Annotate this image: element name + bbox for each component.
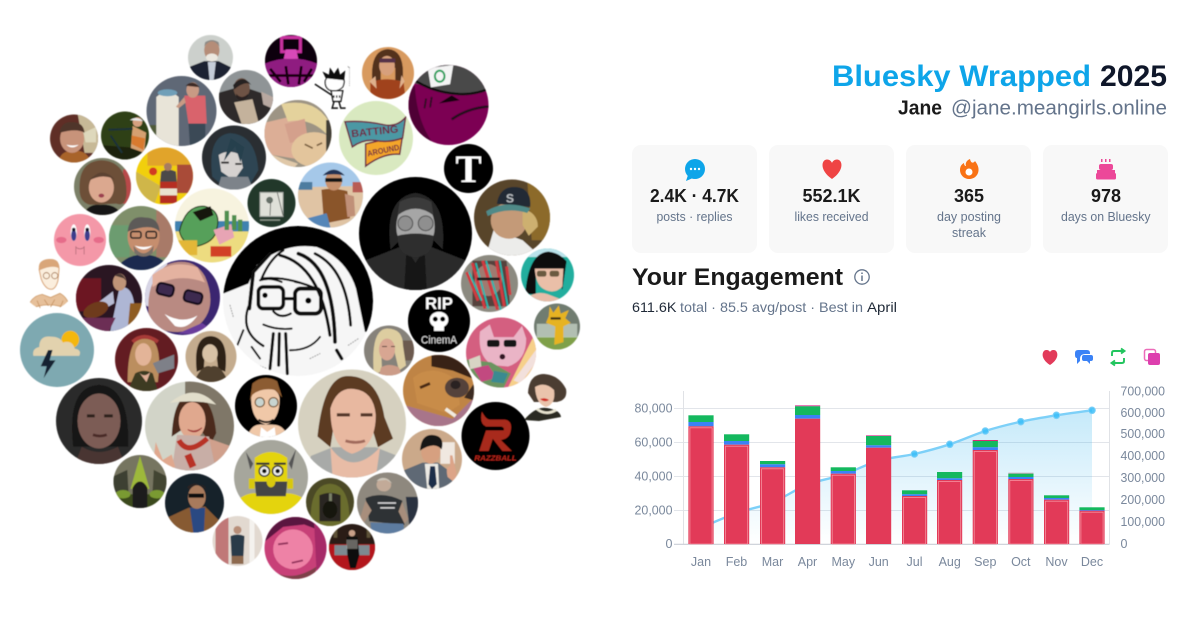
- avatar: yellow star mascot at field: [534, 304, 580, 350]
- bar: Feb: [724, 434, 749, 544]
- avatar cluster: [20, 35, 580, 579]
- icon: likes: [1043, 350, 1057, 365]
- avatar: sepia portrait woman: [186, 331, 236, 382]
- avatar: older man in suit: [188, 35, 233, 80]
- avatar: red-cyan glitch portrait: [461, 255, 518, 312]
- heading: your engagement: Your Engagement: [632, 264, 843, 291]
- panel: posts and replies: 2.4K · 4.7K: [650, 186, 739, 206]
- bar: Aug: [937, 472, 962, 544]
- month labels: May: [831, 555, 856, 569]
- avatar: line-art bust with glasses: [28, 259, 70, 310]
- engagement summary: total · 85.5 avg/post · Best in: [680, 299, 863, 315]
- avatar: woman in dim light: [56, 378, 142, 464]
- avatar: sleeping golden retriever: [403, 355, 474, 426]
- panel: day posting streak: [906, 145, 1031, 253]
- avatar: pink dog in sunglasses: [466, 318, 536, 388]
- month labels: Sep: [974, 555, 996, 569]
- month labels: Jun: [869, 555, 889, 569]
- left axis labels: [634, 402, 673, 551]
- panel: days on Bluesky: days on Bluesky: [1061, 210, 1151, 224]
- avatar: classic film star with pearls: [524, 374, 566, 421]
- panel: day posting streak: streak: [952, 226, 987, 240]
- avatar: redhead with flower crown: [115, 328, 178, 391]
- avatar: man in suit pointing: [402, 429, 462, 489]
- icon: info: [855, 270, 869, 284]
- avatar: Batting Around logo: [339, 101, 413, 175]
- avatar: Batting Around logo: BATTING: [351, 124, 399, 140]
- avatar: bald man with glasses, purple tint: [145, 260, 220, 335]
- panel: day posting streak: day posting: [937, 210, 1001, 224]
- bar: Mar: [760, 461, 785, 544]
- panel: days on Bluesky: [1043, 145, 1168, 253]
- avatar: blonde woman with cat: [264, 100, 337, 170]
- legend icons: [1043, 348, 1160, 366]
- avatar: Calvin with bat: [315, 64, 351, 108]
- avatar: older man in dark t-shirt: [357, 472, 418, 534]
- icon: birthday cake: [1096, 159, 1116, 180]
- avatar: curly-haired woman: [74, 158, 131, 215]
- title: Bluesky Wrapped: [832, 60, 1091, 93]
- month labels: Nov: [1045, 555, 1068, 569]
- month labels: Mar: [762, 555, 783, 569]
- avatar: purple onion cartoon: [408, 65, 488, 145]
- right axis labels: 600,000: [1120, 406, 1165, 420]
- avatar: RIP Cinema skull logo: [408, 290, 470, 352]
- avatar: smiling man with glasses: [109, 206, 173, 270]
- avatar: magenta line art: [265, 35, 317, 87]
- bar: Oct: [1008, 473, 1034, 544]
- month labels: Jan: [691, 555, 711, 569]
- month labels: Aug: [939, 555, 961, 569]
- icon: flame: [960, 159, 979, 179]
- avatar: baseball player: [474, 180, 550, 256]
- panel: likes received: likes received: [794, 210, 869, 224]
- month labels: Oct: [1011, 555, 1031, 569]
- panel: posts and replies: posts · replies: [656, 210, 732, 224]
- right axis labels: 100,000: [1120, 515, 1165, 529]
- bar: Jul: [902, 490, 927, 544]
- avatar: Batting Around logo: AROUND: [366, 143, 400, 158]
- month labels: Jul: [907, 555, 922, 569]
- panel: days on Bluesky: 978: [1091, 186, 1121, 206]
- icon: quotes: [1144, 350, 1160, 365]
- right axis labels: 400,000: [1120, 449, 1165, 463]
- avatar: RIP Cinema skull logo: RIP: [425, 294, 453, 313]
- month labels: Apr: [798, 555, 817, 569]
- panel: likes received: 552.1K: [802, 186, 860, 206]
- left axis labels: 80,000: [634, 402, 673, 416]
- chart: monthly engagement with cumulative line: [634, 384, 1165, 569]
- panel: likes received: [769, 145, 894, 253]
- month labels: [691, 555, 1103, 569]
- avatar: Razzball logo: [462, 402, 530, 470]
- bar: Jan: [688, 415, 714, 544]
- avatar: woman at beach: [298, 162, 363, 228]
- avatar: dark-haired man in robe: [219, 70, 273, 124]
- avatar: Kirby: [54, 214, 106, 266]
- bar: May: [831, 467, 856, 544]
- avatar: man in sunglasses and brown jacket: [165, 474, 224, 532]
- left axis labels: 0: [666, 537, 673, 551]
- avatar: fiddler on stage: [76, 265, 142, 331]
- engagement summary: April: [867, 299, 897, 315]
- avatar: New York Times logo: [444, 144, 493, 193]
- avatar: Razzball logo: RAZZBALL: [474, 453, 517, 462]
- stacked bars: [688, 405, 1105, 544]
- avatar: pink-lit face: [264, 517, 326, 579]
- user name and handle: @jane.meangirls.online: [951, 98, 1167, 120]
- avatar: New York Times logo: T: [455, 148, 482, 191]
- avatar: cartoon man with sunglasses on teal: [521, 248, 574, 302]
- left axis labels: 20,000: [634, 504, 673, 518]
- panel: posts and replies: [632, 145, 757, 253]
- left axis labels: 40,000: [634, 470, 673, 484]
- bar: Apr: [795, 405, 820, 544]
- bar: Nov: [1044, 495, 1069, 544]
- icon: heart: [823, 160, 841, 179]
- right axis labels: 0: [1120, 537, 1128, 551]
- avatar: blonde woman selfie: [364, 326, 414, 376]
- avatar: rower: [101, 112, 149, 160]
- user name and handle: Jane: [898, 98, 942, 120]
- avatar: baseball player: S: [506, 191, 514, 205]
- avatar: woman in rust top: [362, 47, 414, 99]
- title: 2025: [1100, 60, 1167, 93]
- bar: Dec: [1079, 507, 1105, 544]
- avatar: black and white sketch with glasses: [220, 222, 380, 376]
- avatar: person among garden trees: [114, 455, 166, 508]
- engagement summary: 611.6K: [632, 299, 677, 315]
- avatar: man among soup cans: [136, 148, 193, 204]
- avatar: man with white tank: [146, 76, 216, 146]
- avatar: frog on beach cartoon: [175, 188, 249, 262]
- icon: replies: [1075, 350, 1093, 364]
- avatar: woman in cap with red necklace: [145, 382, 234, 470]
- right axis labels: 200,000: [1120, 493, 1165, 507]
- right axis labels: 700,000: [1120, 384, 1165, 398]
- avatar: storm weather icon: [20, 313, 94, 387]
- icon: chat bubble: [685, 159, 705, 181]
- avatar: mirror selfie: [212, 516, 262, 566]
- avatar: RIP Cinema skull logo: CinemA: [421, 334, 457, 346]
- avatar: yellow horned cartoon: [234, 440, 308, 514]
- month labels: Dec: [1081, 555, 1103, 569]
- engagement summary: [632, 299, 897, 315]
- bar: Sep: [973, 440, 998, 544]
- avatar: black and white portrait man: [359, 177, 472, 290]
- cumulative area and line: [702, 407, 1095, 544]
- right axis labels: 300,000: [1120, 471, 1165, 485]
- avatar: seated figure on red carpet: [329, 524, 375, 570]
- left axis labels: 60,000: [634, 436, 673, 450]
- avatar: cartoon man with glasses: [235, 375, 297, 437]
- avatar: anime character with dark blue hair: [202, 126, 266, 190]
- avatar: smiling man in car: [50, 114, 98, 162]
- icon: reposts: [1112, 348, 1124, 366]
- avatar: woman with brown hair, large: [298, 370, 406, 478]
- right axis labels: 500,000: [1120, 427, 1165, 441]
- right axis labels: [1120, 384, 1165, 551]
- month labels: Feb: [726, 555, 747, 569]
- avatar: masked figure in hood: [306, 478, 354, 526]
- grid lines: [674, 391, 1110, 544]
- bar: Jun: [866, 435, 891, 544]
- panel: day posting streak: 365: [954, 186, 984, 206]
- avatar: green record sleeve: [248, 179, 296, 227]
